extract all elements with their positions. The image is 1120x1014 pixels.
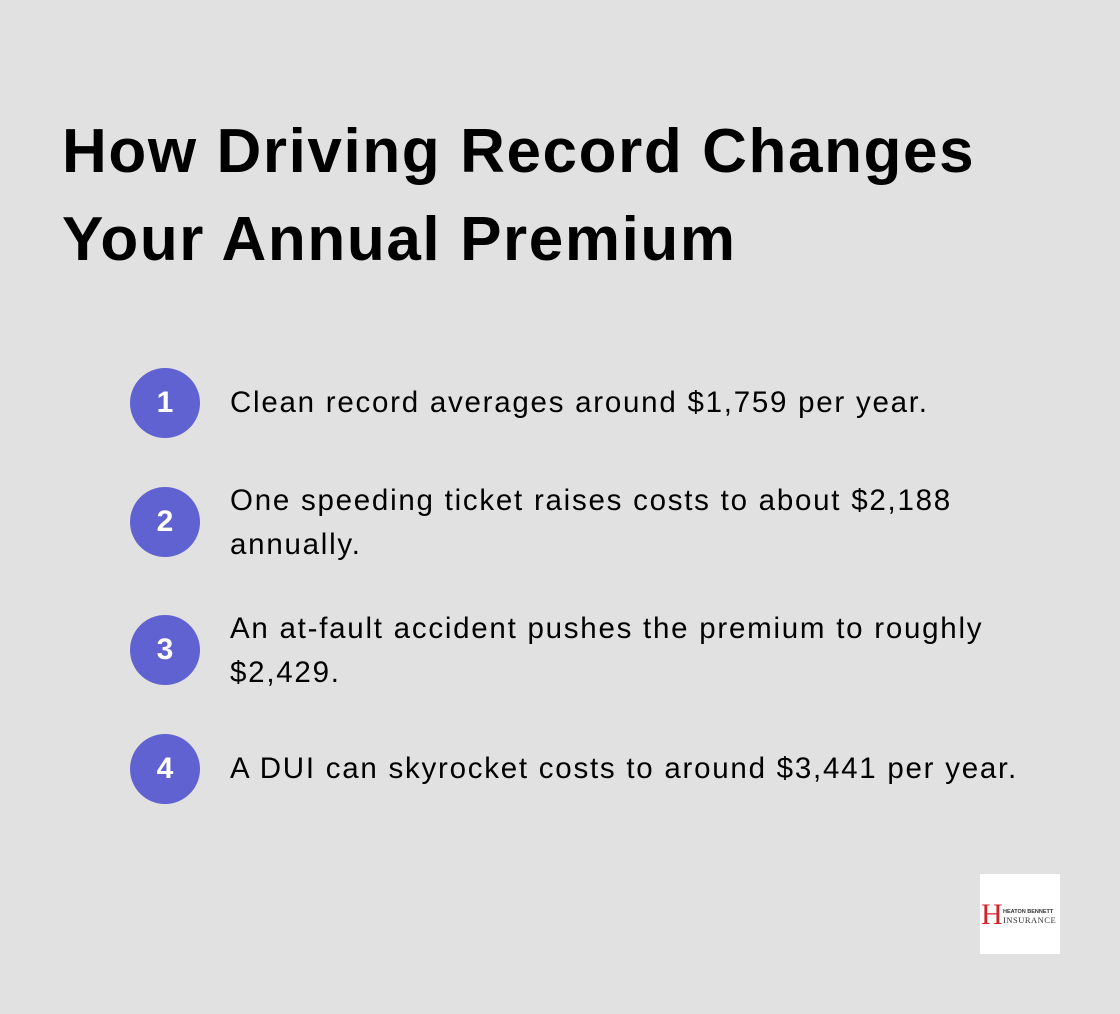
title: Your Annual Premium bbox=[62, 205, 737, 274]
title: How Driving Record Changes bbox=[62, 117, 975, 186]
item 4 bbox=[130, 734, 1018, 804]
item 2: annually. bbox=[230, 528, 362, 561]
item 1: Clean record averages around $1,759 per year. bbox=[230, 386, 929, 419]
item 4: 4 bbox=[157, 752, 173, 785]
logo: HEATON BENNETT bbox=[1003, 909, 1053, 915]
item 2: 2 bbox=[157, 505, 173, 538]
item 3: $2,429. bbox=[230, 656, 341, 689]
item 1 bbox=[130, 368, 929, 438]
logo: H bbox=[981, 898, 1003, 931]
item 1: 1 bbox=[157, 386, 173, 419]
logo bbox=[980, 874, 1060, 954]
item 4: A DUI can skyrocket costs to around $3,441 per year. bbox=[230, 752, 1018, 785]
logo: INSURANCE bbox=[1003, 915, 1056, 925]
item 2: One speeding ticket raises costs to about $2,188 bbox=[230, 484, 952, 517]
item 3: An at-fault accident pushes the premium to roughly bbox=[230, 612, 983, 645]
item 3: 3 bbox=[157, 633, 173, 666]
item 3 bbox=[130, 612, 983, 689]
item 2 bbox=[130, 484, 952, 561]
title bbox=[62, 117, 975, 274]
